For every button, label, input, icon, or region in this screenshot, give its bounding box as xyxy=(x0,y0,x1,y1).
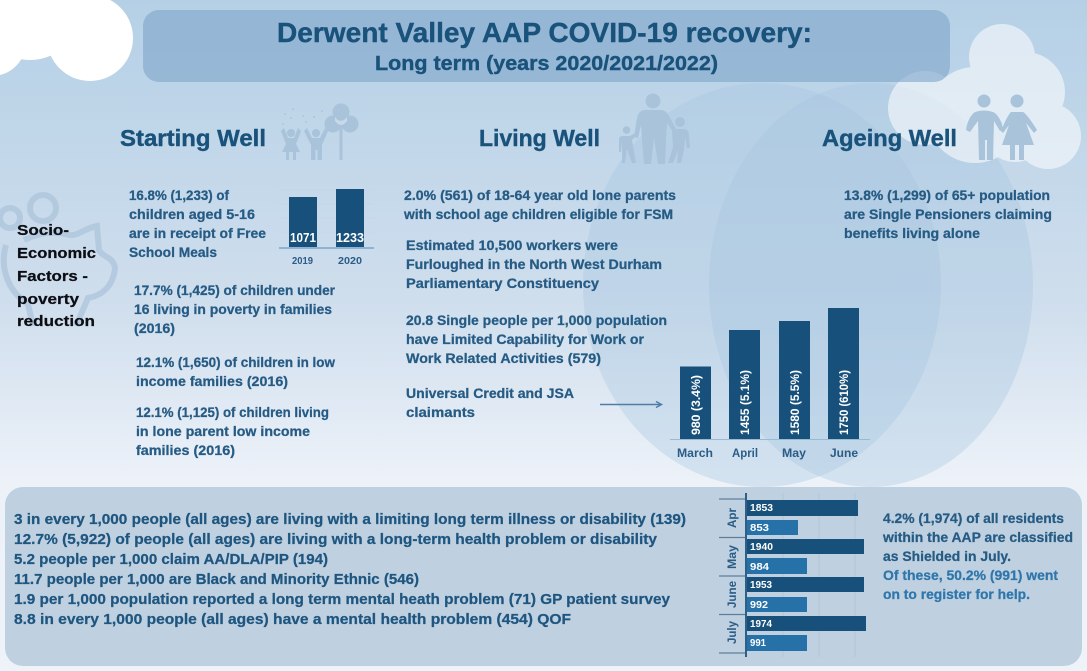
heading: socio-economic factors: reduction xyxy=(17,313,95,330)
text: health statistics: 12.7% (5,922) of people (all ages) are living with a long-term health problem or disability xyxy=(14,532,657,548)
panel: starting well xyxy=(120,104,374,458)
text: lone parent families: in lone parent low income xyxy=(136,424,311,439)
icon: couple xyxy=(966,94,1037,160)
text: lone parents fsm: 2.0% (561) of 18-64 year old lone parents xyxy=(404,188,676,203)
bar chart: shielded residents: 1974 xyxy=(750,618,772,630)
bar chart: universal credit claimants: March xyxy=(677,448,713,460)
panel: living well xyxy=(403,94,870,460)
text: furloughed workers: Estimated 10,500 workers were xyxy=(406,238,619,253)
bar chart: universal credit claimants: May xyxy=(782,448,807,460)
heading: socio-economic factors: Economic xyxy=(17,245,96,262)
heading: socio-economic factors: poverty xyxy=(17,291,80,308)
text: furloughed workers: Parliamentary Constituency xyxy=(406,276,600,291)
text: free school meals: children aged 5-16 xyxy=(129,207,256,222)
text: lone parents fsm xyxy=(403,188,676,222)
heading: starting well: Starting Well xyxy=(120,125,266,151)
text: child poverty: (2016) xyxy=(134,321,175,336)
bar chart: universal credit claimants: April xyxy=(732,448,758,460)
text: shielded residents: on to register for help. xyxy=(883,587,1030,602)
heading: socio-economic factors: Socio- xyxy=(17,222,69,239)
text: free school meals: 16.8% (1,233) of xyxy=(129,188,229,203)
text: free school meals: are in receipt of Free xyxy=(129,226,266,241)
text: furloughed workers: Furloughed in the North West Durham xyxy=(406,257,662,272)
icon: piggy bank and coins xyxy=(0,195,115,326)
text: universal credit: claimants xyxy=(406,405,475,420)
bar chart: universal credit claimants: June xyxy=(830,448,858,460)
heading: living well: Living Well xyxy=(479,125,600,151)
icon: family xyxy=(619,94,690,164)
text: low income families: 12.1% (1,650) of children in low xyxy=(136,355,335,370)
text: limited capability xyxy=(406,313,667,366)
text: single pensioners: 13.8% (1,299) of 65+ population xyxy=(844,188,1050,203)
bar chart: shielded residents: July xyxy=(727,620,739,644)
bar chart: free school meals xyxy=(279,189,374,267)
heading: socio-economic factors: Factors - xyxy=(17,268,88,285)
bar chart: free school meals: 1233 xyxy=(336,230,364,245)
text: shielded residents xyxy=(882,511,1073,602)
text: lone parent families: 12.1% (1,125) of children living xyxy=(136,405,329,420)
panel: ageing well xyxy=(822,94,1052,241)
title banner xyxy=(143,10,950,82)
bar chart: shielded residents: Apr xyxy=(727,507,739,528)
text: universal credit xyxy=(406,386,574,420)
bar chart: shielded residents: June xyxy=(727,581,739,608)
text: health statistics: 1.9 per 1,000 population reported a long term mental heath problem (71) GP patient survey xyxy=(14,592,670,608)
text: free school meals: School Meals xyxy=(129,245,217,260)
panel: long term health xyxy=(5,487,1082,666)
text: lone parent families: families (2016) xyxy=(136,443,235,458)
bar chart: universal credit claimants: 1580 (5.5%) xyxy=(788,370,802,435)
text: single pensioners xyxy=(844,188,1052,241)
text: shielded residents: within the AAP are classified xyxy=(882,530,1073,545)
heading: socio-economic factors xyxy=(17,222,96,330)
bar chart: shielded residents: 1853 xyxy=(750,502,773,514)
text: shielded residents: as Shielded in July. xyxy=(883,549,1011,564)
arch: right ellipse xyxy=(709,83,1033,487)
bar chart: shielded residents: 853 xyxy=(750,522,769,534)
subtitle: Long term (years 2020/2021/2022) xyxy=(375,53,718,75)
text: health statistics: 11.7 people per 1,000 are Black and Minority Ethnic (546) xyxy=(14,572,419,588)
text: limited capability: have Limited Capability for Work or xyxy=(406,332,645,347)
text: shielded residents: Of these, 50.2% (991) went xyxy=(883,568,1059,583)
text: low income families: income families (2016) xyxy=(136,374,288,389)
bar chart: universal credit claimants: 1750 (610%) xyxy=(837,370,851,435)
text: health statistics xyxy=(14,512,686,628)
text: free school meals xyxy=(129,188,266,260)
title: Derwent Valley AAP COVID-19 recovery: xyxy=(277,17,812,48)
text: shielded residents: 4.2% (1,974) of all residents xyxy=(883,511,1064,526)
text: single pensioners: benefits living alone xyxy=(844,226,981,241)
bar chart: universal credit claimants: 980 (3.4%) xyxy=(689,375,703,435)
bar chart: free school meals: 2019 xyxy=(292,256,313,267)
text: health statistics: 8.8 in every 1,000 people (all ages) have a mental health problem (454) QOF xyxy=(14,612,571,628)
bar chart: universal credit claimants xyxy=(670,308,870,460)
bar chart: shielded residents xyxy=(719,493,866,657)
text: lone parents fsm: with school age children eligible for FSM xyxy=(403,207,673,222)
bar chart: shielded residents: 1953 xyxy=(750,579,772,591)
text: low income families xyxy=(136,355,335,389)
text: health statistics: 3 in every 1,000 people (all ages) are living with a limiting long term illness or disability (139) xyxy=(14,512,686,528)
text: health statistics: 5.2 people per 1,000 claim AA/DLA/PIP (194) xyxy=(14,552,328,568)
arrow xyxy=(600,402,662,408)
text: child poverty: 16 living in poverty in families xyxy=(134,302,332,317)
cloud: top left xyxy=(0,0,133,81)
bar chart: universal credit claimants: 1455 (5.1%) xyxy=(738,370,752,435)
text: limited capability: 20.8 Single people per 1,000 population xyxy=(406,313,667,328)
text: limited capability: Work Related Activities (579) xyxy=(406,351,601,366)
text: single pensioners: are Single Pensioners claiming xyxy=(844,207,1052,222)
bar chart: shielded residents: 991 xyxy=(750,637,766,649)
text: furloughed workers xyxy=(406,238,662,291)
text: child poverty xyxy=(134,283,336,336)
bar chart: shielded residents: 984 xyxy=(750,561,769,573)
heading: ageing well: Ageing Well xyxy=(822,125,957,151)
arch: left ellipse xyxy=(583,83,941,487)
bar chart: shielded residents: May xyxy=(727,544,739,569)
bar chart: free school meals: 2020 xyxy=(338,256,362,267)
text: child poverty: 17.7% (1,425) of children under xyxy=(134,283,336,298)
cloud: top right xyxy=(888,24,1081,169)
bar chart: shielded residents: 1940 xyxy=(750,541,773,553)
text: lone parent families xyxy=(136,405,329,458)
text: universal credit: Universal Credit and JSA xyxy=(406,386,574,401)
bar chart: shielded residents: 992 xyxy=(750,599,768,611)
bar chart: free school meals: 1071 xyxy=(290,230,316,245)
icon: children and tree xyxy=(281,104,358,160)
